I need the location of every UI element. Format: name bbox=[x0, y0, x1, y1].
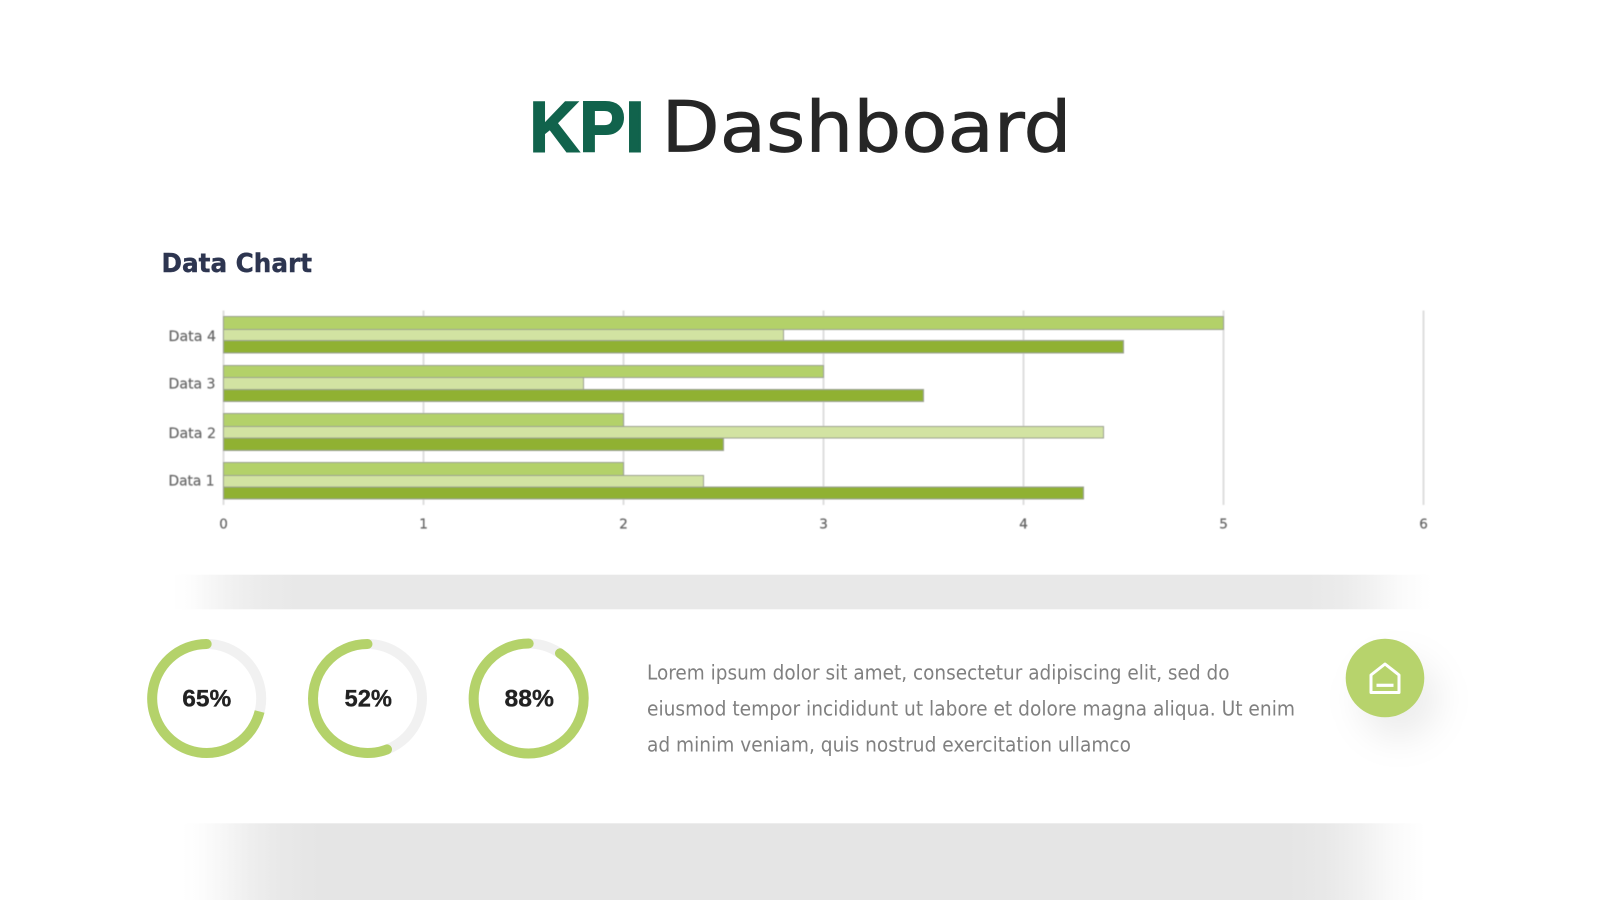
text block: description: ad minim veniam, quis nostrud exercitation ullamco bbox=[647, 732, 1131, 756]
axis labels: 6 bbox=[1419, 516, 1428, 532]
bars: data 1 bbox=[224, 462, 1084, 499]
category labels: Data 2 bbox=[168, 426, 216, 442]
text block: description: Lorem ipsum dolor sit amet, consectetur adipiscing elit, sed do bbox=[647, 661, 1230, 685]
bars: data 2 bbox=[224, 414, 1104, 450]
category labels bbox=[168, 329, 216, 490]
category labels: Data 4 bbox=[168, 329, 216, 345]
donut: 52% bbox=[313, 644, 422, 753]
bars: data 3 bbox=[224, 366, 924, 402]
donut: 65%: 65% bbox=[182, 686, 231, 713]
shadow band: bottom bbox=[182, 823, 1425, 900]
heading: data chart: Data Chart bbox=[162, 249, 312, 279]
donut: 65% bbox=[152, 639, 261, 753]
axis labels: 0 bbox=[219, 516, 228, 532]
axis labels: 2 bbox=[619, 516, 628, 532]
donut: 88% bbox=[474, 643, 584, 754]
axis labels: 5 bbox=[1219, 516, 1228, 532]
text block: description bbox=[647, 661, 1295, 756]
title: Dashboard bbox=[662, 87, 1072, 169]
text block: description: eiusmod tempor incididunt ut labore et dolore magna aliqua. Ut enim bbox=[647, 696, 1295, 720]
axis labels: 3 bbox=[819, 516, 828, 532]
donut: 88%: 88% bbox=[504, 686, 554, 713]
title: KPI bbox=[530, 89, 644, 168]
category labels: Data 1 bbox=[168, 474, 214, 490]
donut: 52%: 52% bbox=[344, 686, 392, 713]
axis labels: 4 bbox=[1019, 516, 1028, 532]
bars: data 4 bbox=[224, 316, 1224, 353]
category labels: Data 3 bbox=[168, 376, 216, 392]
axis labels bbox=[219, 516, 1428, 532]
bar chart bbox=[168, 310, 1428, 532]
icon: home button bbox=[1346, 639, 1439, 739]
shadow band: top bbox=[172, 575, 1432, 609]
axis labels: 1 bbox=[419, 516, 428, 532]
